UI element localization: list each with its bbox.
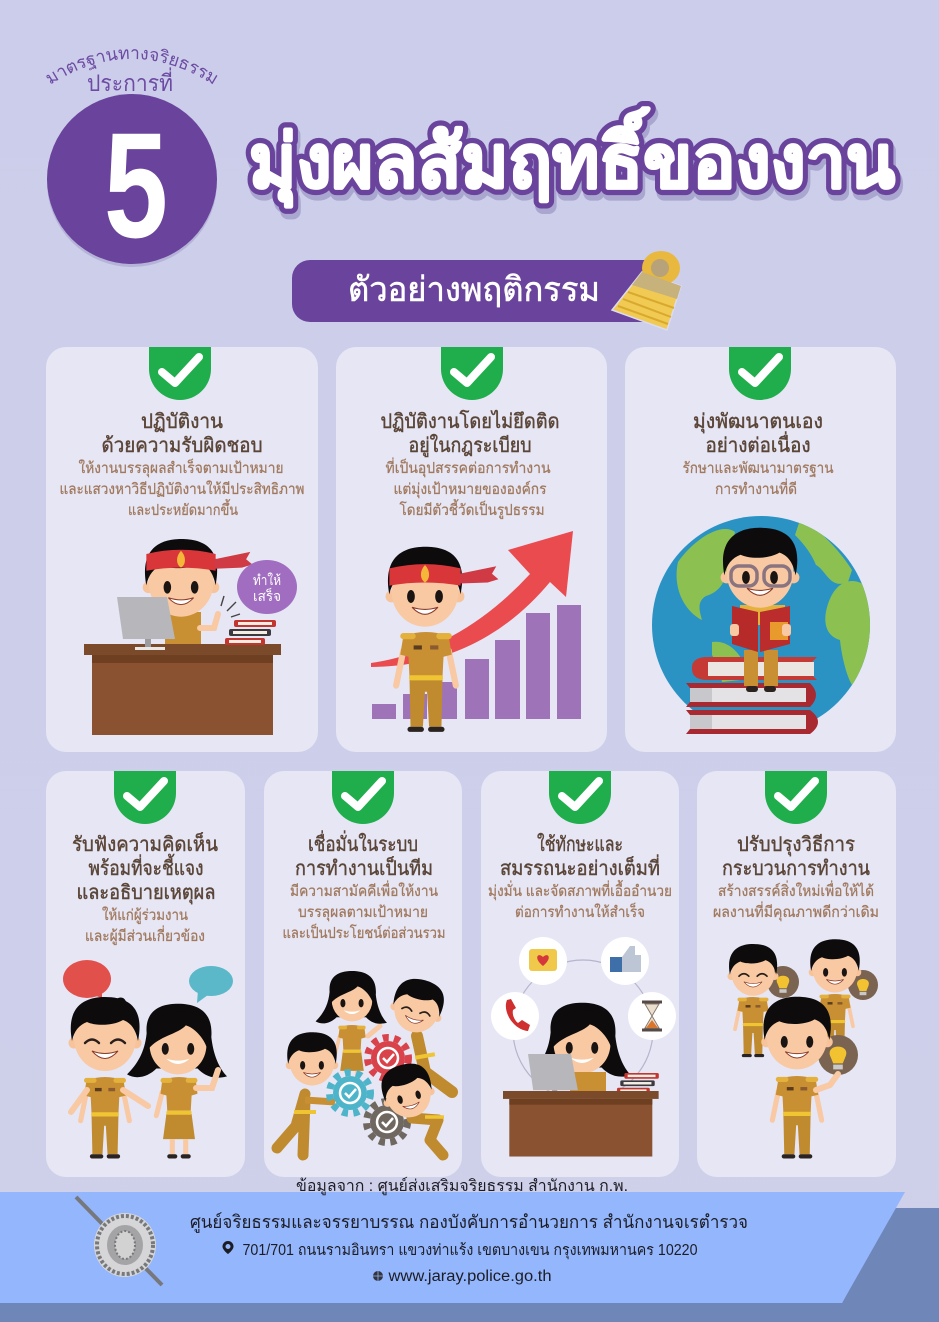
heading <box>102 411 262 457</box>
description: ผลงานที่มีคุณภาพดีกว่าเดิม <box>713 901 879 922</box>
description: สร้างสรรค์สิ่งใหม่เพื่อให้ได้ <box>718 880 874 900</box>
heading: ปฏิบัติงาน <box>141 411 223 433</box>
arrow: rising trend <box>371 531 573 667</box>
footer dark background band <box>0 1208 939 1322</box>
heading: การทำงานเป็นทีม <box>295 855 433 880</box>
seated woman <box>531 1003 631 1092</box>
heading: และอธิบายเหตุผล <box>76 882 216 905</box>
description <box>488 880 672 921</box>
description <box>713 880 879 922</box>
heading <box>693 411 823 457</box>
description: บรรลุผลตามเป้าหมาย <box>298 904 428 922</box>
icon: green check shield <box>114 771 176 824</box>
panel: listen to opinions <box>46 771 245 1177</box>
red gear <box>368 1038 408 1078</box>
speech bubble: เสร็จ <box>253 587 281 604</box>
heading <box>295 830 433 880</box>
right officer <box>809 939 878 1054</box>
heading <box>72 831 218 905</box>
description: มุ่งมั่น และจัดสภาพที่เอื้ออำนวย <box>488 880 672 901</box>
banner: behaviour examples <box>292 251 681 330</box>
man <box>68 997 148 1158</box>
description: ต่อการทำงานให้สำเร็จ <box>515 902 645 921</box>
description: และแสวงหาวิธีปฏิบัติงานให้มีประสิทธิภาพ <box>60 480 304 498</box>
panel: teamwork <box>264 771 462 1177</box>
red speech bubble <box>63 960 111 998</box>
illustration: officer at desk <box>84 539 297 735</box>
icon: green check shield <box>549 771 611 824</box>
globe <box>652 516 870 718</box>
icon: green check shield <box>149 347 211 400</box>
description: และประหยัดมากขึ้น <box>128 499 238 519</box>
purple circle with number five: 5 <box>104 101 168 269</box>
bar chart <box>372 605 581 719</box>
speech bubble: ทำให้ <box>253 572 281 588</box>
front officer <box>761 997 858 1158</box>
icon: green check shield <box>441 347 503 400</box>
bottom right man <box>375 1058 444 1155</box>
organisation name: ศูนย์จริยธรรมและจรรยาบรรณ กองบังคับการอำนวยการ สำนักงานจเรตำรวจ <box>190 1212 748 1233</box>
heading: กระบวนการทำงาน <box>722 858 870 880</box>
speech bubble <box>237 560 297 614</box>
illustration: growth bar chart with officer <box>371 531 581 732</box>
top woman <box>316 971 387 1085</box>
description <box>60 458 304 519</box>
heading: อย่างต่อเนื่อง <box>706 431 810 457</box>
panel: responsible work <box>46 347 318 752</box>
heading: สมรรถนะอย่างเต็มที่ <box>500 854 660 880</box>
book stack <box>686 657 818 734</box>
heading: เชื่อมั่นในระบบ <box>308 830 418 856</box>
illustration: reader on books with globe <box>652 516 880 734</box>
teal gear <box>330 1072 370 1114</box>
heading: พร้อมที่จะชี้แจง <box>88 854 204 880</box>
description: มีความสามัคคีเพื่อให้งาน <box>290 880 438 900</box>
heading: รับฟังความคิดเห็น <box>72 831 218 856</box>
description: โดยมีตัวชี้วัดเป็นรูปธรรม <box>400 499 544 519</box>
icon: globe <box>373 1271 383 1281</box>
illustration: team turning gears <box>277 971 452 1155</box>
reader <box>721 528 799 692</box>
left officer <box>727 944 799 1057</box>
icon: telephone <box>491 992 539 1040</box>
description <box>85 906 205 945</box>
icon: heart message <box>519 937 567 985</box>
main title: มุ่งผลสัมฤทธิ์ของงาน <box>249 107 895 208</box>
heading <box>722 834 870 880</box>
grey gear <box>366 1102 408 1142</box>
description: และผู้มีส่วนเกี่ยวข้อง <box>85 925 205 945</box>
heading: ปฏิบัติงานโดยไม่ยึดติด <box>380 410 560 433</box>
description: รักษาและพัฒนามาตรฐาน <box>682 460 834 477</box>
address: 701/701 ถนนรามอินทรา แขวงท่าแร้ง เขตบางเขน กรุงเทพมหานคร 10220 <box>242 1242 698 1260</box>
heading: อยู่ในกฎระเบียบ <box>408 434 532 458</box>
website: www.jaray.police.go.th <box>387 1268 552 1285</box>
icon: hourglass <box>628 992 676 1040</box>
panel: full skills and competency <box>481 771 679 1177</box>
description <box>282 880 446 942</box>
main title: มุ่งผลสัมฤทธิ์ของงาน <box>249 107 895 208</box>
main title: มุ่งผลสัมฤทธิ์ของงาน <box>251 112 897 213</box>
teal speech bubble <box>189 966 233 1003</box>
illustration: officer with icons at desk <box>491 937 676 1157</box>
curved label: ethics standard: มาตรฐานทางจริยธรรม <box>46 48 218 84</box>
icon: green check shield <box>332 771 394 824</box>
woman <box>127 1004 227 1158</box>
panel: continuous self development <box>625 347 896 752</box>
panel: flexible within rules <box>336 347 607 752</box>
description <box>682 460 834 498</box>
officer <box>386 547 498 732</box>
footer banner <box>0 1192 905 1303</box>
heading <box>380 410 560 458</box>
label: item number: ประการที่ <box>87 67 173 96</box>
heading: มุ่งพัฒนาตนเอง <box>693 411 823 434</box>
description: ให้งานบรรลุผลสำเร็จตามเป้าหมาย <box>78 458 284 478</box>
description: ที่เป็นอุปสรรคต่อการทำงาน <box>386 457 550 478</box>
source credit: ข้อมูลจาก : ศูนย์ส่งเสริมจริยธรรม สำนักงาน ก.พ. <box>296 1176 628 1196</box>
icon: thumbs up <box>601 937 649 985</box>
panel: improve work processes <box>697 771 896 1177</box>
icon: green check shield <box>729 347 791 400</box>
icon: location pin <box>222 1241 234 1254</box>
icon: gold epaulette <box>612 251 681 330</box>
illustration: man and woman talking <box>63 960 233 1158</box>
heading: ด้วยความรับผิดชอบ <box>102 435 262 457</box>
description: ให้แก่ผู้ร่วมงาน <box>102 906 188 924</box>
icon: green check shield <box>765 771 827 824</box>
description: แต่มุ่งเป้าหมายขององค์กร <box>394 481 546 499</box>
description: และเป็นประโยชน์ต่อส่วนรวม <box>282 923 446 942</box>
heading: ปรับปรุงวิธีการ <box>737 834 855 857</box>
description <box>386 457 550 519</box>
left man <box>277 1032 338 1155</box>
purple circle with number five <box>47 94 217 269</box>
banner text: ตัวอย่างพฤติกรรม <box>348 271 600 309</box>
header: standard number badge <box>46 48 218 269</box>
heading <box>500 833 660 880</box>
illustration: three officers with light bulbs <box>727 939 878 1158</box>
description: การทำงานที่ดี <box>715 478 797 498</box>
police emblem <box>76 1197 162 1285</box>
right man <box>385 973 452 1092</box>
heading: ใช้ทักษะและ <box>537 833 623 856</box>
